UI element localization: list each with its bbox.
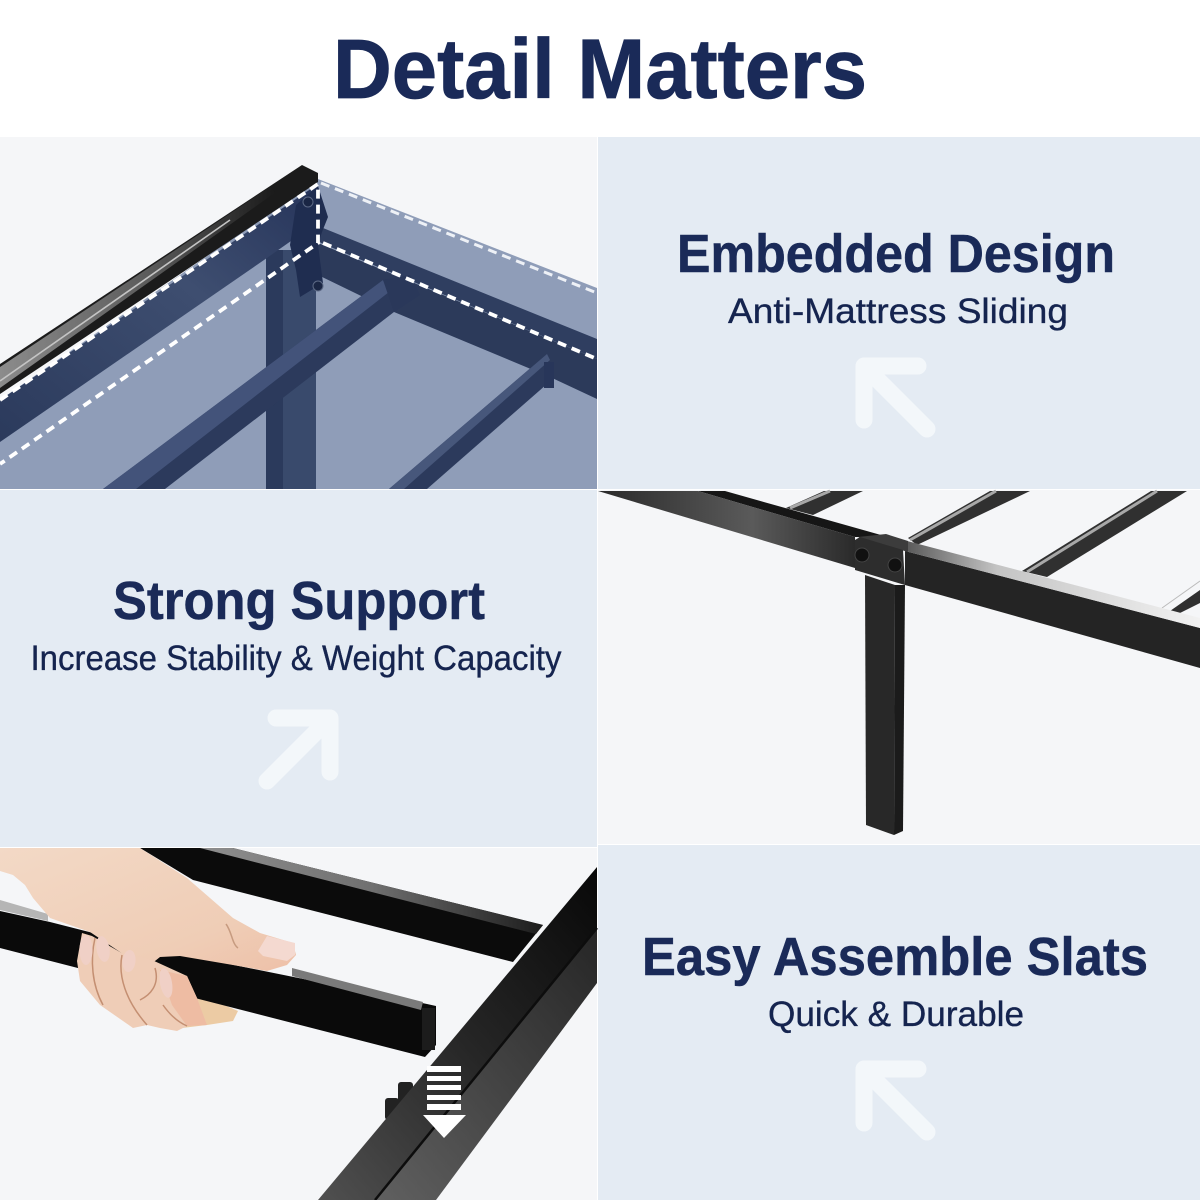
panel: embedded design [598,137,1200,489]
back of hand and thumb [0,848,296,971]
hand [0,848,296,1031]
insertion arrow [423,1066,466,1138]
corner bracket [290,186,328,297]
panel: embedded corner photo [0,137,597,489]
title: Detail Matters [333,22,867,116]
heading: Easy Assemble Slats [642,927,1148,987]
leg [865,575,905,835]
lower palm behind slat [170,990,238,1028]
background slats [786,491,1200,614]
fingers [77,933,207,1031]
panel: slat assembly photo [0,848,597,1200]
arrow up-left [864,366,927,429]
back rail [698,491,888,537]
bracket [855,537,905,585]
slat one [103,275,420,489]
panel: easy assemble slats [598,845,1200,1200]
fingernails [80,935,175,999]
dashed outlines [0,183,597,464]
subheading: Anti-Mattress Sliding [728,292,1068,331]
front rail right section [858,534,1200,668]
right side rail [318,228,597,399]
front rail blue face [0,184,318,442]
slat nubs [385,1082,413,1120]
subheading: Increase Stability & Weight Capacity [30,639,562,678]
slat two [389,354,555,489]
arrow up-left [864,1069,927,1132]
held slat [0,900,436,1057]
bolt [855,548,869,562]
front rail left section [598,491,855,568]
heading: Strong Support [113,571,485,631]
bolt [888,558,902,572]
heading: Embedded Design [677,224,1115,284]
back slat [140,848,543,962]
side rail [318,867,597,1200]
black rail top [0,165,318,394]
blue mattress overlay [0,179,597,489]
thumbnail [258,936,295,961]
frame leg [266,250,316,489]
subheading: Quick & Durable [768,995,1024,1034]
index finger shade [160,970,207,1026]
arrow up-right [267,718,330,781]
panel: center leg photo [598,490,1200,844]
finger creases [92,924,238,1026]
panel: strong support [0,490,597,847]
slat highlights [790,491,1200,608]
